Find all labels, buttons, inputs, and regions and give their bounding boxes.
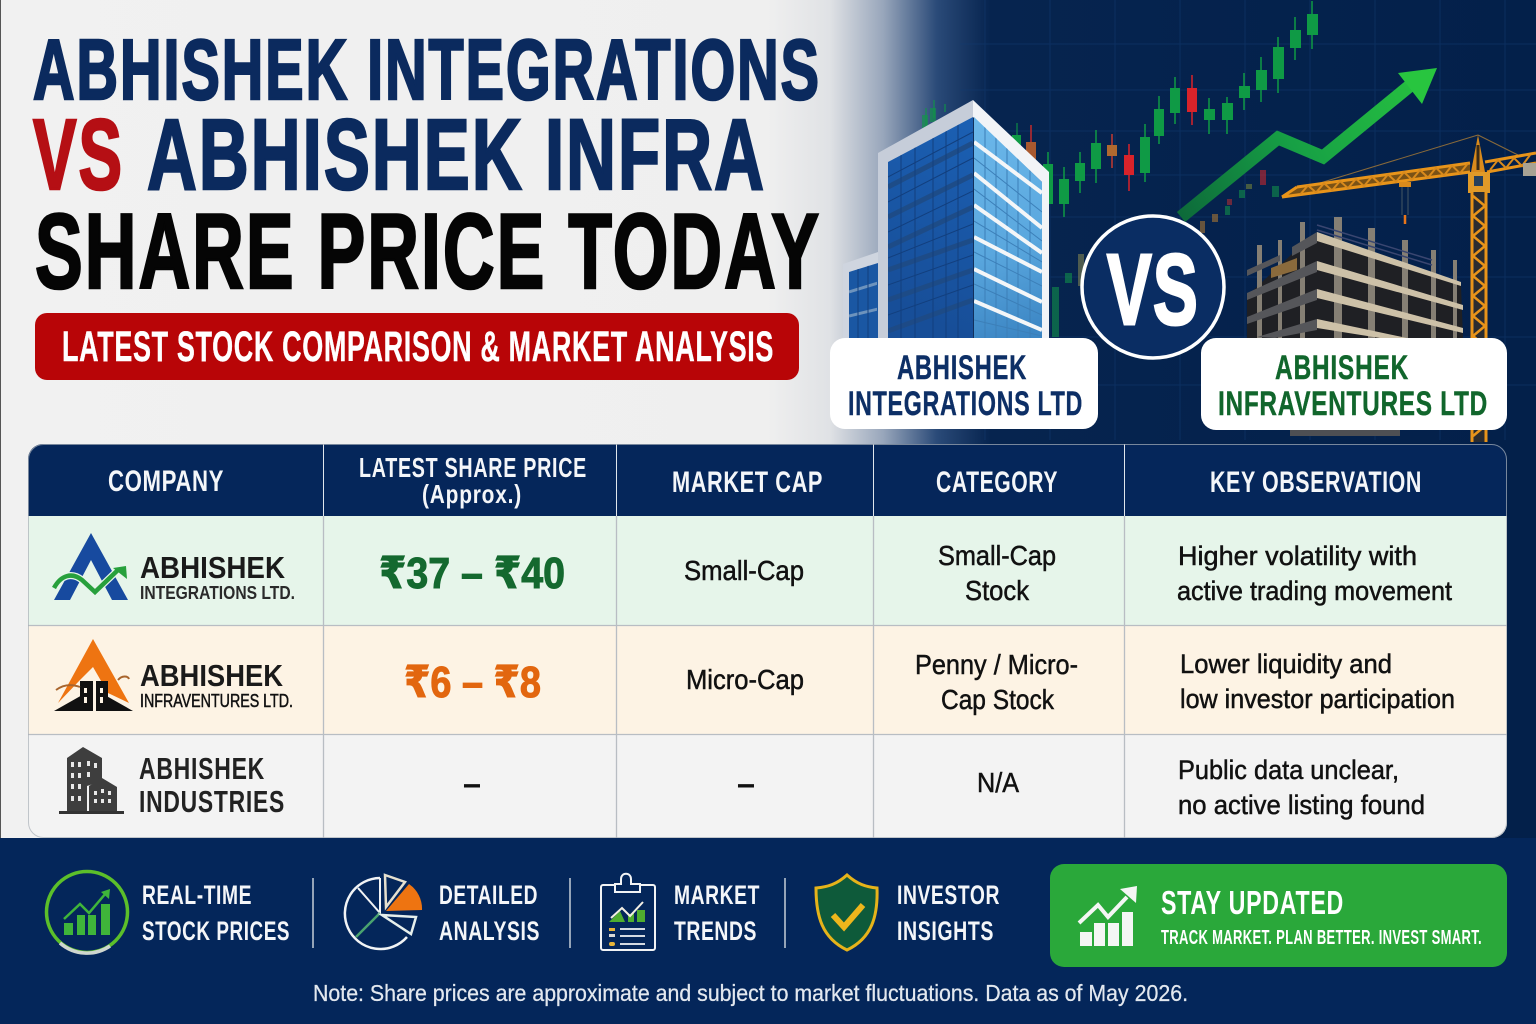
icon: corporate tower <box>843 100 1049 338</box>
logo: Abhishek Infraventures: ABHISHEK <box>140 658 284 693</box>
feature: real-time stock prices: STOCK PRICES <box>142 916 290 946</box>
row: Abhishek Industries: Public data unclear, <box>1178 755 1399 785</box>
feature: investor insights: INVESTOR <box>897 880 1000 910</box>
table header <box>108 452 1422 509</box>
feature: real-time stock prices <box>46 872 290 953</box>
logo: Abhishek Integrations <box>54 533 295 603</box>
feature: real-time stock prices: REAL-TIME <box>142 880 252 910</box>
logo: Abhishek Industries: ABHISHEK <box>139 751 265 786</box>
icon: pie chart <box>345 875 422 949</box>
table header: MARKET CAP <box>672 466 823 499</box>
row: Abhishek Infraventures: Micro-Cap <box>686 664 804 695</box>
title: ABHISHEK INFRA <box>147 99 766 211</box>
comparison table <box>28 444 1507 838</box>
row: Abhishek Integrations: Small-Cap <box>938 540 1056 571</box>
feature: detailed analysis: ANALYSIS <box>439 916 540 946</box>
icon: building under construction <box>1247 217 1463 436</box>
call to action: stay updated: STAY UPDATED <box>1161 884 1344 921</box>
feature: market trends: MARKET <box>674 880 760 910</box>
icon: stock growth circle <box>46 872 128 953</box>
row: Abhishek Integrations: active trading movement <box>1177 576 1452 606</box>
company label: Abhishek Infraventures: ABHISHEK <box>1275 349 1409 387</box>
row: Abhishek Infraventures: ₹6 – ₹8 <box>404 658 541 707</box>
row: Abhishek Integrations: Stock <box>965 575 1030 606</box>
row: Abhishek Industries <box>59 747 1425 820</box>
icon: shield <box>816 875 877 950</box>
row: Abhishek Integrations: ₹37 – ₹40 <box>379 549 565 598</box>
table header: COMPANY <box>108 465 224 498</box>
title: ABHISHEK INTEGRATIONS <box>33 23 821 118</box>
feature: detailed analysis: DETAILED <box>439 880 538 910</box>
row: Abhishek Integrations: Small-Cap <box>684 555 804 586</box>
title: SHARE PRICE TODAY <box>35 191 821 311</box>
feature: investor insights <box>816 875 1000 950</box>
table header: LATEST SHARE PRICE <box>359 452 587 483</box>
company label: Abhishek Infraventures <box>1201 338 1507 430</box>
row: Abhishek Infraventures: Penny / Micro- <box>915 649 1078 680</box>
call to action: stay updated <box>1050 864 1507 967</box>
feature: investor insights: INSIGHTS <box>897 916 994 946</box>
row: Abhishek Industries: N/A <box>977 767 1019 798</box>
row: Abhishek Industries: – <box>737 765 755 803</box>
subtitle banner <box>35 313 799 380</box>
icon: clipboard <box>601 874 655 950</box>
row: Abhishek Infraventures: low investor participation <box>1180 684 1455 714</box>
company label: Abhishek Integrations <box>830 338 1098 429</box>
feature: market trends: TRENDS <box>674 916 757 946</box>
logo: Abhishek Integrations: ABHISHEK <box>140 550 286 585</box>
row: Abhishek Infraventures: Cap Stock <box>941 684 1055 715</box>
title <box>33 23 821 311</box>
logo: Abhishek Infraventures <box>54 639 293 711</box>
table header: KEY OBSERVATION <box>1210 466 1422 499</box>
table header: CATEGORY <box>936 466 1058 499</box>
company label: Abhishek Integrations: ABHISHEK <box>897 349 1027 387</box>
icon: growth chart <box>1079 886 1137 946</box>
feature: market trends <box>601 874 760 950</box>
logo: Abhishek Integrations: INTEGRATIONS LTD. <box>140 583 295 603</box>
icon: construction crane <box>1282 135 1536 442</box>
row: Abhishek Integrations <box>54 533 1452 606</box>
footer band <box>0 838 1536 1024</box>
subtitle banner: LATEST STOCK COMPARISON & MARKET ANALYSIS <box>62 323 774 371</box>
growth arrow <box>1181 68 1437 217</box>
row: Abhishek Industries: – <box>463 765 481 803</box>
title: VS <box>33 99 124 211</box>
row: Abhishek Infraventures <box>54 639 1455 715</box>
row: Abhishek Infraventures: Lower liquidity and <box>1180 649 1392 679</box>
feature: detailed analysis <box>345 875 540 949</box>
candlestick chart <box>922 1 1318 337</box>
VS badge: VS <box>1107 234 1199 346</box>
logo: Abhishek Infraventures: INFRAVENTURES LTD. <box>140 691 293 711</box>
footnote: Note: Share prices are approximate and subject to market fluctuations. Data as of May 2026. <box>313 980 1188 1006</box>
row: Abhishek Integrations: Higher volatility with <box>1178 541 1417 571</box>
logo: Abhishek Industries <box>59 747 285 819</box>
row: Abhishek Industries: no active listing found <box>1178 790 1425 820</box>
table header: (Approx.) <box>422 479 522 509</box>
logo: Abhishek Industries: INDUSTRIES <box>139 784 285 819</box>
VS badge <box>1082 216 1224 358</box>
company label: Abhishek Integrations: INTEGRATIONS LTD <box>848 385 1083 423</box>
